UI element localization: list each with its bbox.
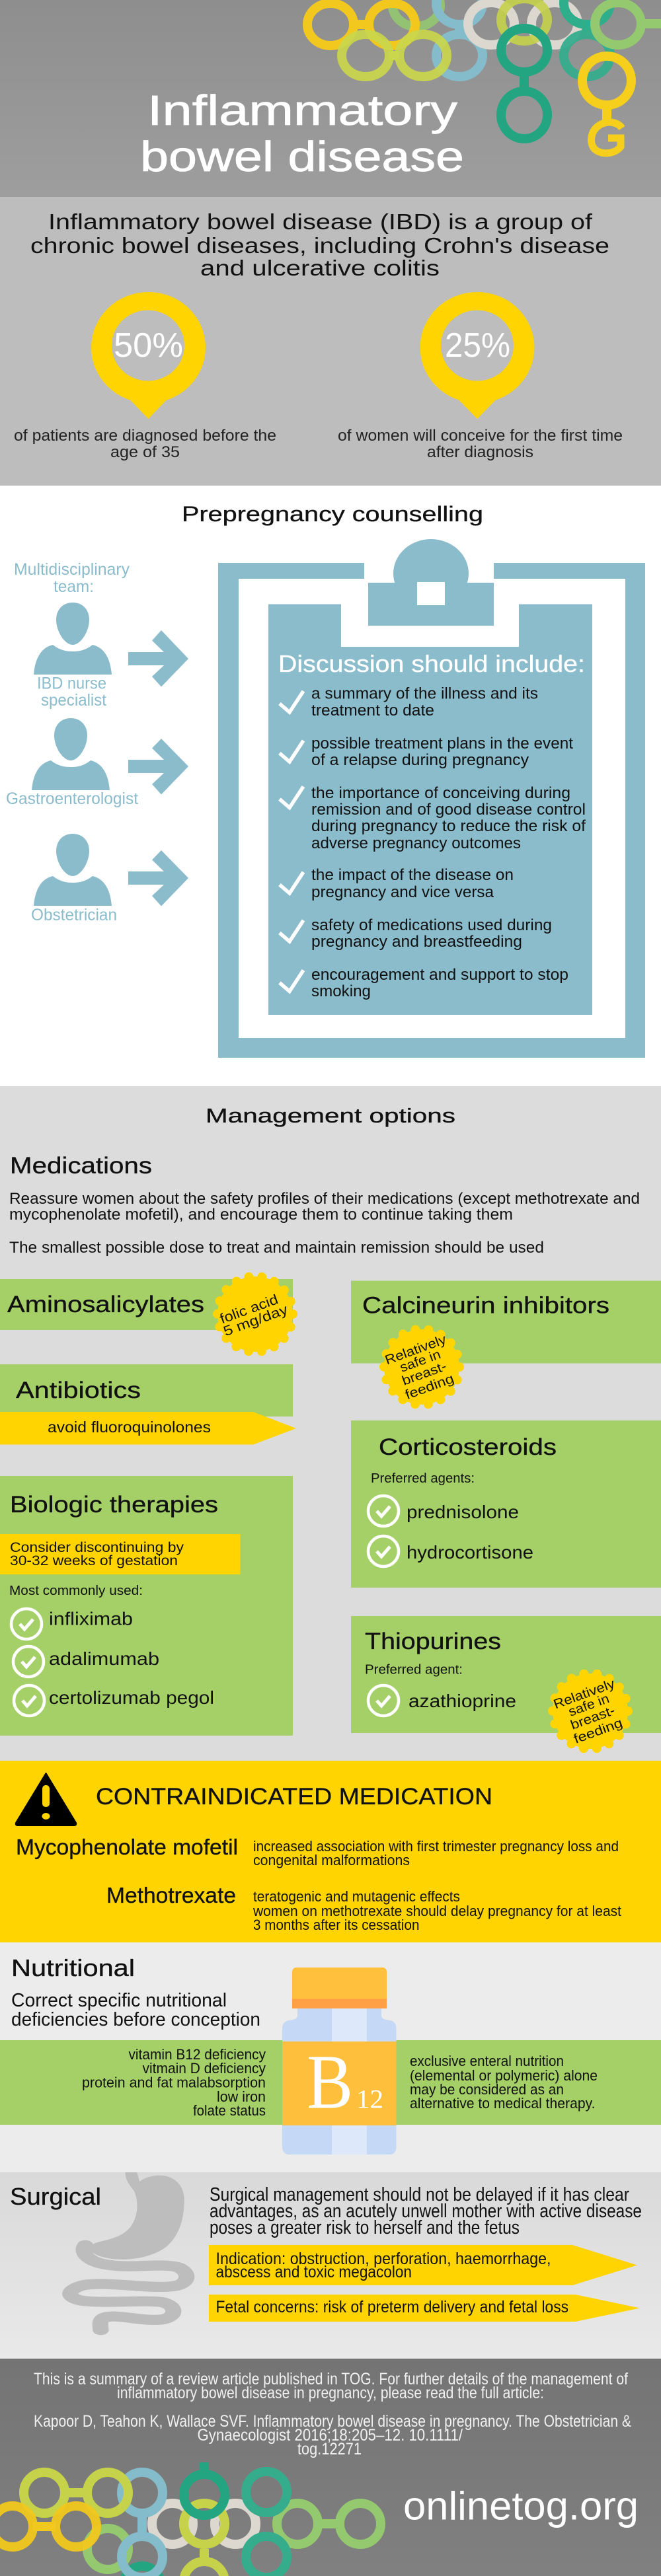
arrow: indication: abscess and toxic megacolon — [215, 2263, 412, 2281]
badge: relatively safe (thiopurines) — [552, 1674, 628, 1749]
card: corticosteroids — [351, 1420, 661, 1588]
badge: folic acid: folic acid — [218, 1292, 280, 1327]
enteral nutrition text: alternative to medical therapy. — [410, 2095, 595, 2112]
checklist — [280, 684, 586, 1000]
card: aminosalicylates: Aminosalicylates — [7, 1292, 204, 1317]
heading: contraindicated medication: CONTRAINDICATED MEDICATION — [96, 1784, 492, 1810]
arrow: obstetrician to discussion — [128, 850, 188, 906]
heading: nutritional: Nutritional — [11, 1954, 135, 1981]
nutritional intro: deficiencies before conception — [11, 2009, 260, 2030]
list: biologic agents: adalimumab — [49, 1648, 159, 1669]
drug: methotrexate: Methotrexate — [106, 1883, 236, 1907]
enteral nutrition text: may be considered as an — [410, 2081, 564, 2098]
badge: folic acid: 5 mg/day — [221, 1302, 290, 1339]
icon: warning triangle — [16, 1773, 76, 1825]
checklist: the importance of conceiving during — [311, 784, 570, 802]
card: thiopurines: Preferred agent: — [365, 1662, 463, 1677]
drug: methotrexate: teratogenic and mutagenic effects — [253, 1888, 460, 1905]
medications text: The smallest possible dose to treat and maintain remission should be used — [9, 1239, 544, 1257]
checklist: adverse pregnancy outcomes — [311, 834, 521, 852]
deficiency list: folate status — [193, 2102, 266, 2119]
source text: Gynaecologist 2016;18:205–12. 10.1111/ — [197, 2426, 463, 2445]
intro text: Inflammatory bowel disease (IBD) is a group of — [48, 209, 593, 234]
icon: B12 bottle — [282, 1968, 397, 2154]
checklist: smoking — [311, 982, 371, 1000]
arrow: nurse to discussion — [128, 630, 188, 687]
badge: relatively safe (calcineurin) — [383, 1329, 459, 1405]
drug: mycophenolate mofetil: Mycophenolate mofetil — [16, 1835, 238, 1859]
icon: obstetrician — [34, 834, 112, 906]
checklist: encouragement and support to stop — [311, 966, 568, 984]
team label — [14, 560, 130, 596]
callout: discontinue — [0, 1534, 241, 1574]
card: antibiotics: Antibiotics — [16, 1378, 141, 1403]
checklist: possible treatment plans in the event — [311, 735, 573, 753]
stat caption: 50%: age of 35 — [110, 443, 180, 461]
drug: methotrexate — [106, 1883, 621, 1933]
icon: B12 bottle: 12 — [356, 2084, 383, 2114]
list: corticosteroid agents — [368, 1496, 533, 1566]
source text: inflammatory bowel disease in pregnancy, please read the full article: — [117, 2384, 544, 2402]
checklist: treatment to date — [311, 702, 434, 719]
team label: team: — [54, 577, 94, 596]
drug: methotrexate: women on methotrexate should delay pregnancy for at least — [253, 1903, 621, 1919]
stat: 50% — [91, 292, 206, 419]
checklist: during pregnancy to reduce the risk of — [311, 817, 586, 835]
label: IBD nurse specialist — [37, 674, 106, 710]
enteral nutrition text: exclusive enteral nutrition — [410, 2053, 564, 2069]
stat caption: 25% — [338, 427, 623, 461]
stat caption: 25%: of women will conceive for the first time — [338, 427, 623, 445]
icon: IBD nurse specialist — [34, 603, 112, 675]
drug: mycophenolate mofetil: congenital malformations — [253, 1852, 410, 1868]
title: bowel disease — [140, 133, 464, 180]
title: Inflammatory — [147, 87, 457, 134]
intro text: chronic bowel diseases, including Crohn's disease — [30, 233, 609, 258]
card: aminosalicylates — [0, 1279, 293, 1330]
drug: mycophenolate mofetil: increased association with first trimester pregnancy loss and — [253, 1838, 619, 1855]
intro text — [30, 209, 609, 280]
medications text: mycophenolate mofetil), and encourage them to continue taking them — [9, 1206, 513, 1224]
deficiency list: vitamin B12 deficiency — [128, 2046, 266, 2063]
card: biologic therapies: Most commonly used: — [9, 1584, 143, 1598]
icon: B12 bottle: B — [307, 2039, 353, 2125]
deficiency list: low iron — [217, 2088, 266, 2105]
heading: surgical: Surgical — [10, 2183, 101, 2210]
enteral nutrition text: (elemental or polymeric) alone — [410, 2067, 598, 2084]
label: IBD nurse specialist: specialist — [41, 691, 106, 710]
deficiency list: vitmain D deficiency — [143, 2060, 266, 2077]
badge: relatively safe (thiopurines): feeding — [572, 1716, 625, 1747]
badge: relatively safe (calcineurin): safe in — [398, 1347, 443, 1376]
card: corticosteroids: Corticosteroids — [379, 1434, 557, 1460]
website: onlinetog.org — [403, 2484, 639, 2528]
badge: folic acid — [217, 1276, 293, 1352]
panel: header — [0, 0, 661, 197]
green band — [0, 2040, 661, 2125]
checklist: pregnancy and breastfeeding — [311, 933, 522, 951]
drug: methotrexate: 3 months after its cessation — [253, 1917, 419, 1933]
stat caption: 50%: of patients are diagnosed before the — [14, 427, 276, 445]
checklist: safety of medications used during — [311, 916, 552, 934]
title — [140, 87, 464, 180]
stat caption: 50% — [14, 427, 276, 461]
badge: relatively safe (calcineurin): feeding — [403, 1372, 456, 1403]
heading: medications: Medications — [10, 1153, 152, 1179]
panel: footer — [0, 2359, 661, 2576]
checklist: remission and of good disease control — [311, 801, 586, 819]
arrow: indication: Indication: obstruction, perforation, haemorrhage, — [215, 2250, 551, 2268]
callout: discontinue: Consider discontinuing by — [10, 1540, 184, 1555]
checklist: the impact of the disease on — [311, 866, 514, 884]
callout: discontinue: 30-32 weeks of gestation — [10, 1553, 178, 1568]
list: thiopurine agent: azathioprine — [408, 1691, 516, 1711]
list: biologic agents: infliximab — [49, 1608, 133, 1629]
arrow: gastroenterologist to discussion — [128, 739, 188, 794]
panel: contraindicated medication — [0, 1761, 661, 1942]
panel: management options — [0, 1086, 661, 1761]
list: biologic agents: certolizumab pegol — [49, 1687, 214, 1708]
arrow: indication — [209, 2245, 637, 2285]
list: corticosteroid agents: hydrocortisone — [407, 1542, 533, 1563]
source text: tog.12271 — [297, 2440, 362, 2458]
checklist: a summary of the illness and its — [311, 684, 538, 703]
panel: nutritional — [0, 1942, 661, 2172]
enteral nutrition text — [410, 2053, 598, 2112]
surgical text — [210, 2184, 642, 2238]
panel: surgical — [0, 2172, 661, 2359]
nutritional intro — [11, 1990, 260, 2030]
checklist: of a relapse during pregnancy — [311, 751, 529, 769]
heading: management options: Management options — [206, 1104, 455, 1127]
drug: mycophenolate mofetil — [16, 1835, 619, 1868]
badge: relatively safe (calcineurin): breast- — [400, 1359, 449, 1389]
label: obstetrician: Obstetrician — [31, 906, 117, 924]
heading: prepregnancy counselling: Prepregnancy counselling — [182, 502, 483, 526]
icon: stomach and intestine — [70, 2172, 186, 2330]
list: corticosteroid agents: prednisolone — [407, 1502, 519, 1522]
stat: 25%: 25% — [445, 326, 510, 365]
surgical text: poses a greater risk to herself and the fetus — [210, 2217, 520, 2238]
arrow: fetal concerns: Fetal concerns: risk of preterm delivery and fetal loss — [215, 2298, 568, 2316]
checklist: pregnancy and vice versa — [311, 883, 494, 901]
card: calcineurin inhibitors — [351, 1280, 661, 1364]
arrow: avoid fluoroquinolones: avoid fluoroquinolones — [48, 1418, 211, 1436]
panel: prepregnancy counselling — [0, 486, 661, 1086]
logo: footer molecule rings — [0, 2462, 381, 2576]
label: gastroenterologist: Gastroenterologist — [6, 790, 138, 808]
label: IBD nurse specialist: IBD nurse — [37, 674, 106, 692]
icon: gastroenterologist — [32, 718, 110, 790]
stat: 25% — [420, 292, 534, 419]
card: antibiotics — [0, 1364, 296, 1444]
badge: relatively safe (thiopurines): safe in — [566, 1691, 611, 1720]
panel: introduction — [0, 197, 661, 486]
badge: relatively safe (thiopurines): Relatively — [552, 1676, 617, 1712]
medications text — [9, 1190, 640, 1257]
arrow: avoid fluoroquinolones — [0, 1412, 296, 1444]
card: corticosteroids: Preferred agents: — [371, 1471, 475, 1486]
clipboard — [218, 539, 645, 1058]
list: biologic agents — [11, 1608, 214, 1716]
nutritional intro: Correct specific nutritional — [11, 1990, 227, 2011]
card: thiopurines — [351, 1616, 661, 1733]
list: thiopurine agent — [368, 1685, 516, 1716]
clipboard heading: Discussion should include: — [278, 650, 585, 677]
deficiency list — [82, 2046, 266, 2119]
deficiency list: protein and fat malabsorption — [82, 2075, 266, 2090]
arrow: fetal concerns — [209, 2295, 640, 2322]
source text — [34, 2370, 631, 2458]
medications text: Reassure women about the safety profiles of their medications (except methotrexate and — [9, 1190, 640, 1208]
badge: relatively safe (thiopurines): breast- — [568, 1703, 617, 1733]
stat: 50%: 50% — [114, 326, 183, 365]
intro text: and ulcerative colitis — [200, 256, 440, 280]
badge: relatively safe (calcineurin): Relatively — [383, 1332, 448, 1368]
card: calcineurin inhibitors: Calcineurin inhibitors — [362, 1293, 609, 1319]
logo: molecule rings — [307, 0, 661, 153]
stat caption: 25%: after diagnosis — [427, 443, 533, 461]
card: thiopurines: Thiopurines — [365, 1629, 501, 1654]
card: biologic therapies — [0, 1476, 293, 1736]
team label: Multidisciplinary — [14, 560, 130, 579]
card: biologic therapies: Biologic therapies — [10, 1492, 218, 1518]
